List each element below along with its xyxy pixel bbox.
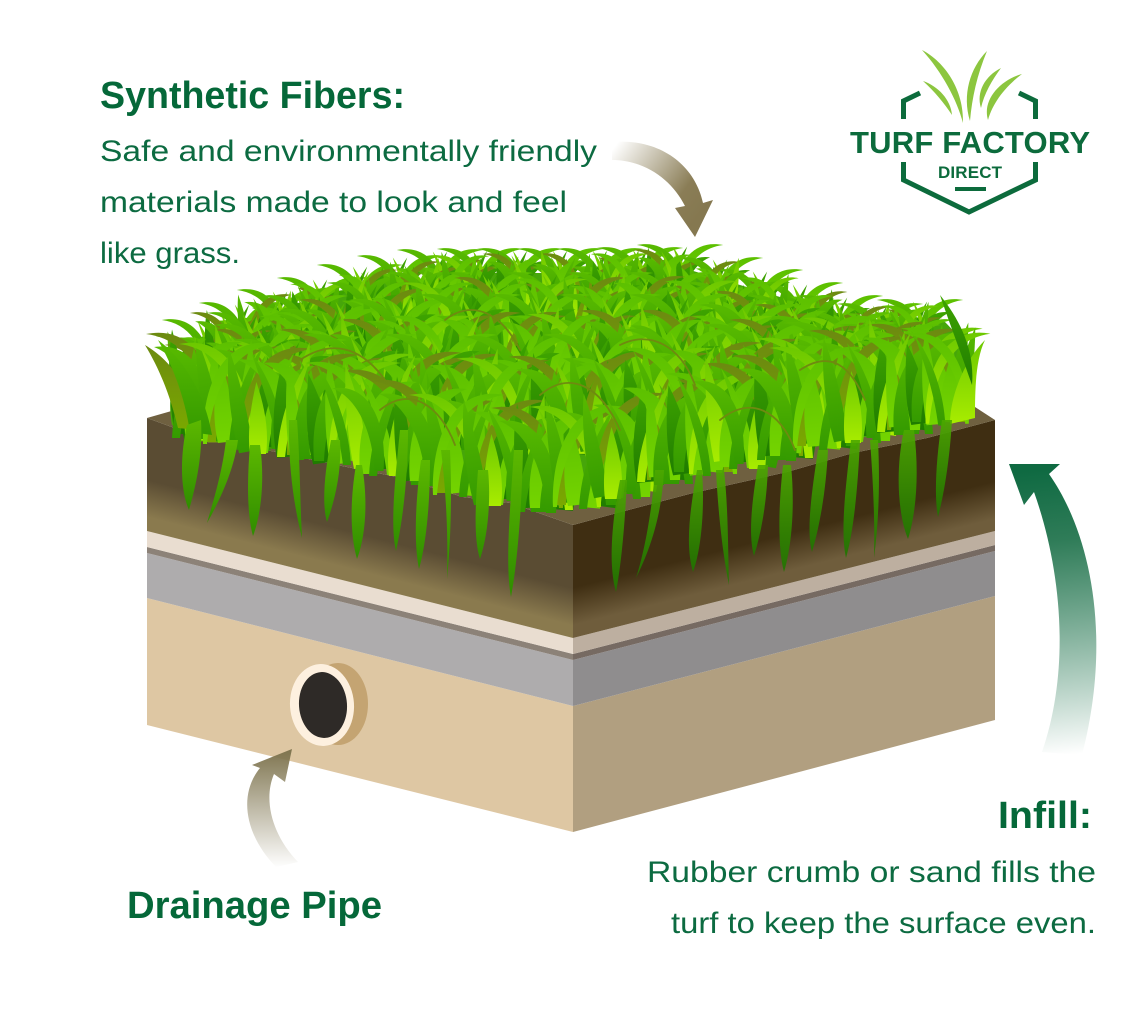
grass rows back xyxy=(156,247,959,424)
logo hexagon frame xyxy=(904,93,1036,212)
heading: infill: Infill: xyxy=(998,795,1092,837)
grass rows middle xyxy=(172,294,983,457)
description: synthetic fibers: materials made to look and feel xyxy=(100,186,567,219)
heading: drainage pipe: Drainage Pipe xyxy=(127,885,382,927)
grass rows front xyxy=(146,325,990,513)
logo grass leaves xyxy=(922,50,1022,123)
logo sub-wordmark: DIRECT xyxy=(938,163,1003,182)
fine back strands xyxy=(162,244,963,396)
layer: gravel xyxy=(147,551,995,706)
long blades over soil, right face xyxy=(612,420,952,592)
arrow: to drainage pipe xyxy=(247,749,298,867)
description: synthetic fibers xyxy=(100,135,597,270)
logo: Turf Factory Direct xyxy=(850,50,1090,212)
layer: soil xyxy=(147,300,995,638)
panel: turf cross-section block xyxy=(147,300,995,832)
text block: synthetic fibers xyxy=(100,75,597,270)
text block: infill xyxy=(647,795,1096,940)
description: infill: turf to keep the surface even. xyxy=(671,907,1096,940)
left and right edge blades xyxy=(145,295,985,435)
arrow: to synthetic fibers xyxy=(612,142,713,237)
heading: synthetic fibers: Synthetic Fibers: xyxy=(100,75,405,117)
layer: base sand with pipe face xyxy=(147,596,995,832)
grass tuft xyxy=(145,244,990,513)
description: synthetic fibers: Safe and environmentally friendly xyxy=(100,135,597,168)
logo wordmark: TURF FACTORY xyxy=(850,125,1090,160)
icon: drainage pipe xyxy=(287,662,368,748)
arrow: to infill xyxy=(1009,464,1096,755)
description: synthetic fibers: like grass. xyxy=(100,237,240,270)
description: infill xyxy=(647,856,1096,940)
layer: dark membrane xyxy=(147,545,995,660)
layer: cream underlay xyxy=(147,531,995,654)
grass mass xyxy=(170,270,972,506)
thin olive arcs xyxy=(300,310,865,450)
description: infill: Rubber crumb or sand fills the xyxy=(647,856,1096,889)
long blades over soil, left face xyxy=(182,420,523,597)
